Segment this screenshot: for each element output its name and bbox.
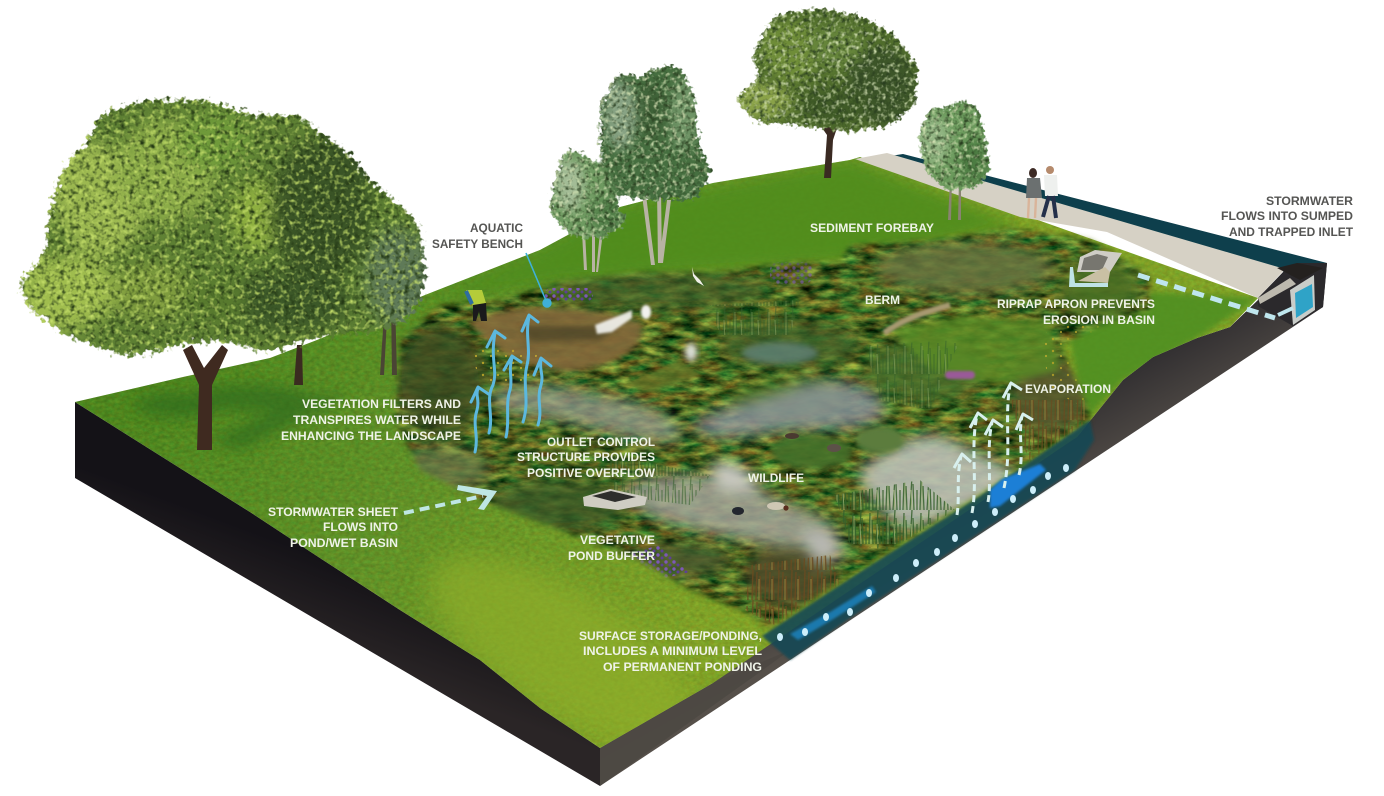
label: aquatic safety bench: SAFETY BENCH [432,239,523,251]
label: vegetative pond buffer [568,535,656,563]
label: stormwater inlet: FLOWS INTO SUMPED [1221,211,1353,223]
label: outlet control: POSITIVE OVERFLOW [527,468,655,480]
label: vegetation filters: ENHANCING THE LANDSCAPE [281,431,461,443]
label: stormwater sheet flows: POND/WET BASIN [290,538,398,550]
riprap apron headwall [1069,250,1122,287]
channel: surface storage ponding [762,420,1094,660]
label: wildlife: WILDLIFE [748,473,804,485]
label: stormwater sheet flows [268,507,398,550]
stormwater flow into inlet [1138,275,1293,318]
outlet control structure [583,489,647,510]
label: vegetation filters: VEGETATION FILTERS AND [302,399,461,411]
label: stormwater inlet [1221,196,1354,239]
street strip [890,154,1327,272]
lily pads [742,342,818,364]
right bank grass [1070,290,1258,420]
label: vegetation filters: TRANSPIRES WATER WHILE [293,415,461,427]
island vegetation [772,435,852,469]
soil block: right face [600,263,1327,786]
label: vegetation filters [281,399,461,443]
water reflections [595,310,632,334]
sidewalk [855,153,1285,298]
flowers [545,288,593,301]
vegetation tone patches [390,242,1140,607]
label: surface storage [579,631,762,674]
label: outlet control: OUTLET CONTROL [547,437,655,449]
ponding water dots [777,464,1069,641]
label: outlet control: STRUCTURE PROVIDES [517,452,655,464]
lower grass highlight [422,550,684,738]
label: stormwater sheet flows: STORMWATER SHEET [268,507,398,519]
label: berm: BERM [865,295,900,307]
arrows: transpiration [471,315,551,452]
label: outlet control [517,437,655,480]
ducks [732,433,841,515]
label: stormwater inlet: AND TRAPPED INLET [1229,227,1353,239]
tree shadow on grass [135,385,350,450]
trees: birch group [550,65,712,272]
label: riprap apron [997,299,1155,327]
label: sediment forebay: SEDIMENT FOREBAY [810,223,934,235]
label: aquatic safety bench [432,223,523,251]
label: vegetative pond buffer: POND BUFFER [568,551,656,563]
egret [692,267,704,286]
back hillside grass [430,160,1020,300]
label: surface storage: OF PERMANENT PONDING [603,662,762,674]
tree: small near path [918,100,990,220]
arrow: stormwater sheet flow [404,485,497,513]
people walking [1026,166,1058,218]
reed beds [835,480,955,550]
label: riprap apron: EROSION IN BASIN [1043,315,1155,327]
label: stormwater sheet flows: FLOWS INTO [323,522,398,534]
label: aquatic safety bench: AQUATIC [470,223,523,235]
berm path [884,305,950,333]
label: surface storage: INCLUDES A MINIMUM LEVEL [583,646,762,658]
arrows: evaporation [954,383,1033,515]
label: stormwater inlet: STORMWATER [1266,196,1354,208]
grass surface [75,157,1258,748]
mud bench [470,307,642,372]
pond water [490,381,1018,565]
tree: large foreground [15,100,425,450]
label: surface storage: SURFACE STORAGE/PONDING, [579,631,762,643]
worker [466,290,487,321]
tree: back large [735,8,918,178]
label: vegetative pond buffer: VEGETATIVE [580,535,655,547]
inlet box [1258,263,1327,326]
panel: wetland vegetation and pond [392,224,1154,630]
label: evaporation: EVAPORATION [1025,384,1111,396]
label: riprap apron: RIPRAP APRON PREVENTS [997,299,1155,311]
berm grass [890,315,1060,385]
pointer: aquatic safety bench [526,253,552,308]
soil block: left face [75,402,600,786]
